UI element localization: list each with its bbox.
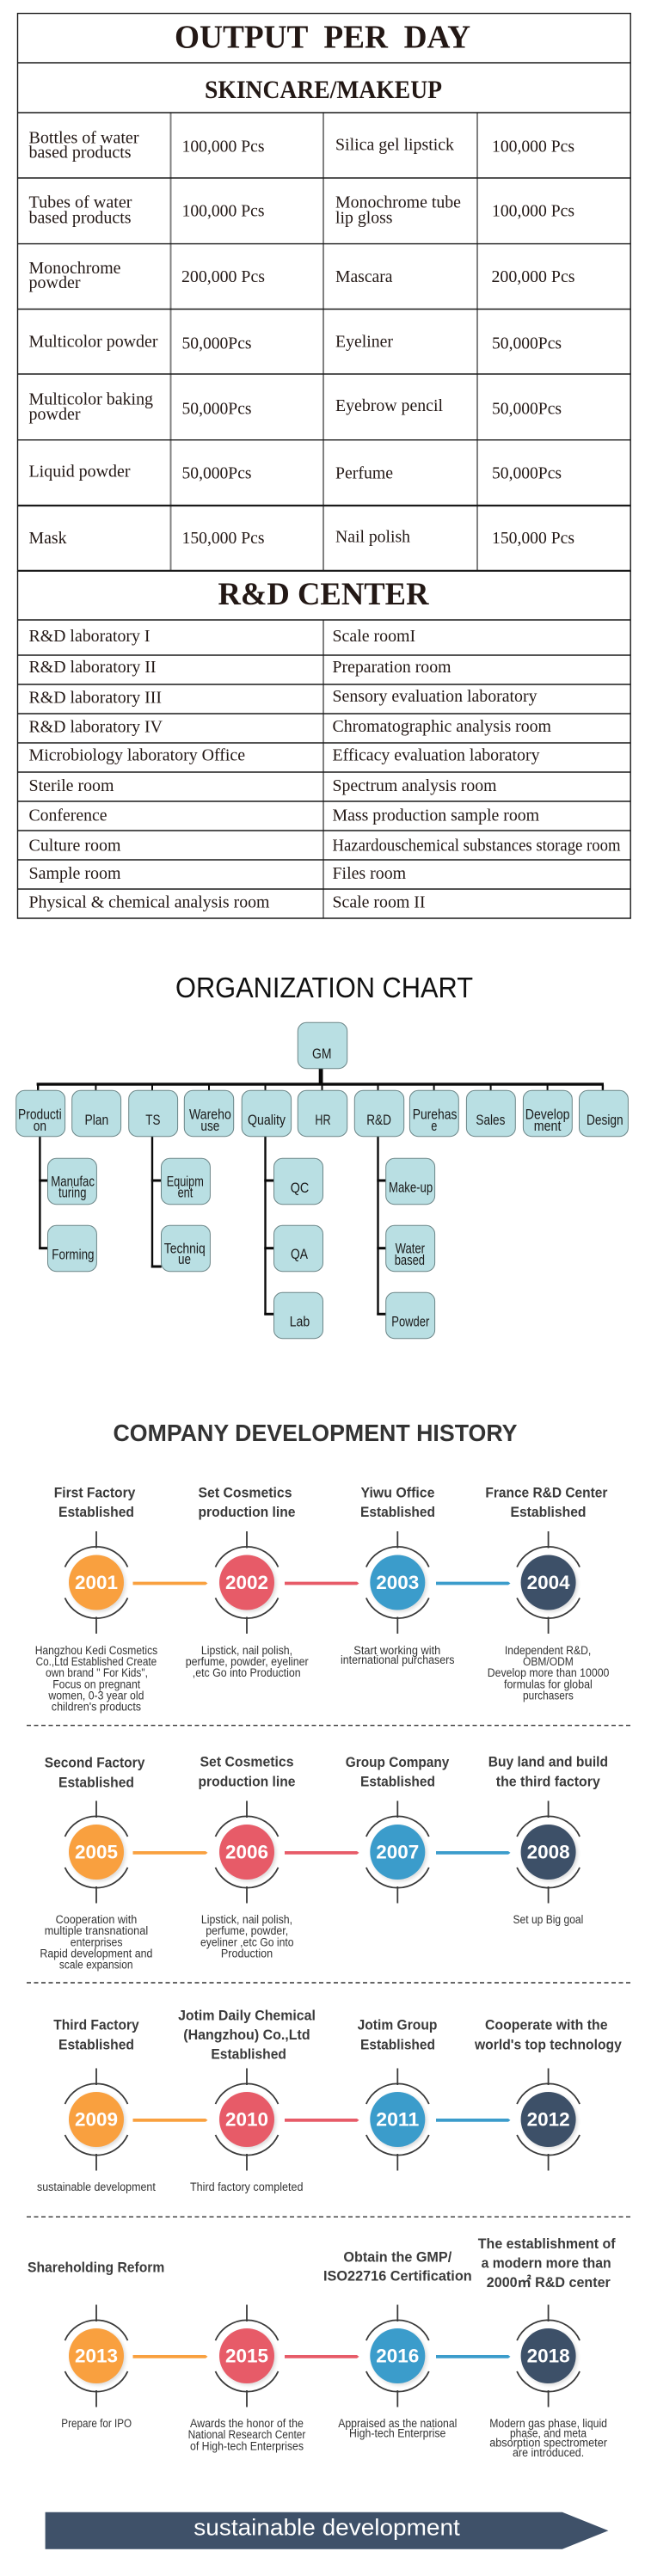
headings row 4: 2000㎡ R&D center (487, 2274, 611, 2291)
headings row 4 (28, 2236, 616, 2291)
row 2: Tubes of water (29, 194, 132, 212)
descriptions row 1: Focus on pregnant (52, 1677, 140, 1690)
room list: right column: Mass production sample room (332, 807, 540, 825)
node: 2001: 2001 (75, 1572, 118, 1593)
node: 2002 (215, 1531, 279, 1634)
descriptions row 4: Modern gas phase, liquid (489, 2417, 607, 2430)
box: Development (523, 1090, 572, 1137)
headings row 4: Shareholding Reform (28, 2260, 164, 2275)
row 7: Mask (29, 530, 67, 548)
headings row 2: Group Company (346, 1755, 450, 1770)
box: Production (16, 1090, 65, 1137)
headings row 2: Second Factory (45, 1756, 145, 1771)
box: GM: GM (312, 1046, 332, 1062)
descriptions row 1: OBM/ODM (523, 1655, 574, 1668)
box: Quality (242, 1090, 292, 1137)
headings row 2: Buy land and build (488, 1755, 608, 1770)
box: TS (129, 1090, 178, 1137)
headings row 1: Established (511, 1505, 587, 1520)
row 3: 200,000 Pcs (181, 268, 265, 286)
room list: left column: Sterile room (29, 776, 114, 795)
row 3: Monochrome (29, 260, 120, 278)
box: Powder (386, 1292, 435, 1339)
box: Lab: Lab (290, 1314, 310, 1329)
room list: left column: Physical & chemical analysis room (29, 893, 270, 912)
room list: right column: Files room (332, 864, 407, 883)
descriptions row 1: ,etc Go into Production (193, 1666, 301, 1679)
descriptions row 3: Third factory completed (190, 2180, 303, 2193)
row 4: Eyeliner (335, 334, 394, 352)
row 7 (29, 528, 574, 548)
descriptions row 1: own brand " For Kids", (46, 1666, 148, 1679)
node: 2003: 2003 (376, 1572, 419, 1593)
headings row 1: Established (360, 1505, 435, 1520)
connector arrows row 2 (132, 1851, 511, 1855)
headings row 2: Established (58, 1775, 134, 1790)
room list: left column: R&D laboratory IV (29, 718, 163, 737)
box: Manufacturing: turing (58, 1185, 86, 1200)
box: Water based: Water (396, 1241, 425, 1256)
row 7: 150,000 Pcs (492, 530, 574, 548)
descriptions row 1: women, 0-3 year old (47, 1689, 144, 1702)
box: Plan (72, 1090, 121, 1137)
timeline row: 2001-2004 (35, 1486, 609, 1713)
descriptions row 2: perfume, powder, (206, 1924, 288, 1937)
room list: left column (29, 627, 270, 912)
headings row 4: Obtain the GMP/ (343, 2249, 452, 2265)
timeline row: 2009-2012 (37, 2009, 623, 2193)
box: QA (273, 1225, 323, 1272)
descriptions row 1: Independent R&D, (505, 1644, 591, 1657)
descriptions row 1: Hangzhou Kedi Cosmetics (35, 1644, 157, 1657)
row 1: Silica gel lipstick (335, 136, 454, 155)
box: GM (298, 1022, 347, 1069)
row 1: based products (29, 144, 131, 162)
room list: left column: R&D laboratory III (29, 689, 162, 708)
headings row 3: Cooperate with the (485, 2018, 607, 2033)
row 4: 50,000Pcs (182, 335, 251, 353)
node: 2015 (215, 2304, 279, 2407)
node: 2002: 2002 (225, 1572, 268, 1593)
descriptions row 1: purchasers (523, 1689, 574, 1702)
row 5: Eyebrow pencil (335, 397, 444, 415)
row 3: Mascara (335, 268, 393, 286)
row 6: Perfume (335, 464, 393, 482)
room list: right column: Efficacy evaluation laboratory (332, 746, 540, 765)
box: Make-up: Make-up (389, 1180, 433, 1195)
descriptions row 4: Awards the honor of the (190, 2417, 304, 2430)
node: 2010: 2010 (225, 2108, 268, 2130)
row 1: Bottles of water (29, 129, 139, 148)
descriptions row 2: Cooperation with (56, 1913, 137, 1926)
box: Warehouse: Wareho (189, 1107, 231, 1123)
descriptions row 4: of High-tech Enterprises (190, 2439, 304, 2452)
room list: right column: Spectrum analysis room (332, 776, 497, 795)
descriptions row 1: perfume, powder, eyeliner (186, 1655, 309, 1668)
room list: left column: R&D laboratory I (29, 627, 150, 646)
row 1: 100,000 Pcs (492, 138, 574, 156)
box: Technique: Techniq (164, 1241, 206, 1256)
headings row 4: The establishment of (478, 2236, 616, 2252)
box: Development: ment (534, 1119, 562, 1134)
box: Quality: Quality (248, 1113, 286, 1128)
headings row 3: Jotim Daily Chemical (178, 2009, 316, 2024)
node: 2008: 2008 (527, 1841, 570, 1862)
room list: right column: Chromatographic analysis room (332, 717, 551, 736)
node: 2018 (517, 2304, 580, 2407)
node: 2011: 2011 (376, 2108, 419, 2130)
node: 2011 (366, 2069, 429, 2170)
box: HR: HR (315, 1113, 331, 1128)
box: Purchase: e (431, 1119, 437, 1134)
row 3 (29, 260, 574, 292)
row 5: Multicolor baking (29, 390, 153, 409)
row 2: 100,000 Pcs (182, 203, 265, 220)
box: TS: TS (145, 1113, 160, 1128)
box: QA: QA (291, 1247, 308, 1262)
descriptions row 1: Lipstick, nail polish, (201, 1644, 292, 1657)
node: 2012 (517, 2069, 580, 2170)
descriptions row 1: Start working with (353, 1644, 440, 1657)
row 4: Multicolor powder (29, 334, 158, 352)
row 5: powder (29, 406, 81, 424)
node: 2016 (366, 2304, 429, 2407)
descriptions row 3: sustainable development (37, 2180, 156, 2193)
box: Design: Design (587, 1113, 624, 1128)
node: 2009 (65, 2069, 127, 2170)
connector arrows row 1 (132, 1582, 511, 1585)
row 2 (29, 194, 574, 227)
descriptions row 2: multiple transnational (45, 1924, 148, 1937)
row 6 (29, 463, 562, 482)
box: R&D: R&D (366, 1113, 391, 1128)
row 5: 50,000Pcs (182, 400, 251, 418)
node: 2004 (517, 1531, 580, 1634)
box: QC (273, 1158, 323, 1205)
node: 2015: 2015 (225, 2345, 268, 2366)
headings row 3: Established (211, 2047, 286, 2063)
descriptions row 4: High-tech Enterprise (349, 2426, 445, 2439)
descriptions row 4: phase, and meta (510, 2426, 587, 2439)
box: Manufacturing: Manufac (51, 1174, 95, 1189)
node: 2006: 2006 (225, 1841, 268, 1862)
descriptions row 4: Prepare for IPO (61, 2417, 132, 2430)
headings row 2: production line (198, 1774, 296, 1789)
arrow banner: sustainable development: sustainable development (194, 2514, 460, 2540)
box: Powder: Powder (391, 1314, 430, 1329)
headings row 1: Yiwu Office (361, 1486, 435, 1501)
box: Purchase: Purehas (413, 1107, 457, 1123)
row 6: 50,000Pcs (492, 464, 562, 482)
descriptions row 4: are introduced. (513, 2446, 584, 2459)
room list: right column (332, 627, 621, 912)
title: output per day: OUTPUT PER DAY (175, 19, 470, 55)
descriptions row 2: scale expansion (59, 1959, 132, 1972)
row 1: 100,000 Pcs (182, 138, 265, 156)
room list: left column: Microbiology laboratory Office (29, 746, 245, 765)
box: Water based (386, 1225, 435, 1272)
box: Technique: ue (178, 1252, 191, 1267)
node: 2007 (366, 1800, 429, 1904)
row 6: 50,000Pcs (182, 464, 251, 482)
headings row 3: Jotim Group (358, 2018, 437, 2033)
room list: left column: Conference (29, 807, 108, 825)
box: Manufacturing (48, 1158, 96, 1205)
connector lines (37, 1068, 604, 1316)
box: Production: on (34, 1119, 46, 1134)
descriptions row 1: Co.,Ltd Established Create (36, 1655, 157, 1668)
panel: R&D center table (17, 571, 630, 918)
node: 2018: 2018 (527, 2345, 570, 2366)
box: R&D (354, 1090, 404, 1137)
node: 2005: 2005 (75, 1841, 118, 1862)
row 6: Liquid powder (29, 463, 131, 481)
panel: output per day table (17, 14, 630, 571)
row 1 (29, 129, 574, 162)
node: 2012: 2012 (527, 2108, 570, 2130)
descriptions row 1: Develop more than 10000 (488, 1666, 609, 1679)
node: 2010 (215, 2069, 279, 2170)
connector arrows row 3 (132, 2119, 511, 2122)
headings row 2: the third factory (496, 1774, 601, 1789)
headings row 1: France R&D Center (485, 1486, 608, 1501)
node: 2001 (65, 1531, 127, 1634)
node: 2009: 2009 (75, 2108, 118, 2130)
descriptions row 2: Rapid development and (40, 1947, 152, 1960)
heading: organization chart: ORGANIZATION CHART (175, 972, 473, 1003)
descriptions row 2: eyeliner ,etc Go into (200, 1935, 294, 1948)
box: Equipment (162, 1158, 210, 1205)
descriptions row 3 (37, 2180, 303, 2193)
timeline row: 2013-2018 (28, 2236, 616, 2459)
descriptions row 4: Appraised as the national (338, 2417, 457, 2430)
descriptions row 2: enterprises (71, 1935, 123, 1948)
descriptions row 4: National Research Center (188, 2428, 306, 2441)
headings row 3: Established (360, 2037, 435, 2052)
headings row 3: Third Factory (53, 2018, 139, 2033)
arrow banner: sustainable development (46, 2512, 608, 2549)
headings row 3: Established (58, 2037, 134, 2052)
heading: R&D center: R&D CENTER (218, 577, 430, 612)
box: Sales: Sales (476, 1113, 505, 1128)
node: 2005 (65, 1800, 127, 1904)
headings row 1: production line (198, 1505, 296, 1520)
row 2: based products (29, 209, 131, 227)
box: HR (298, 1090, 347, 1137)
descriptions row 1 (35, 1644, 609, 1713)
box: Plan: Plan (84, 1113, 108, 1128)
node: 2013: 2013 (75, 2345, 118, 2366)
row 5 (29, 390, 562, 424)
node: 2006 (215, 1800, 279, 1904)
headings row 4: a modern more than (482, 2256, 611, 2272)
node: 2003 (366, 1531, 429, 1634)
descriptions row 2: Set up Big goal (513, 1913, 583, 1926)
row 4: 50,000Pcs (492, 335, 562, 353)
box: QC: QC (291, 1181, 309, 1196)
node: 2008 (517, 1800, 580, 1904)
descriptions row 1: international purchasers (341, 1653, 455, 1666)
headings row 1: First Factory (54, 1486, 136, 1501)
box: Technique (162, 1225, 210, 1272)
row 3: powder (29, 274, 81, 292)
descriptions row 1: children's products (52, 1700, 141, 1713)
connector arrows row 4 (132, 2355, 511, 2358)
chart: organization chart (16, 1022, 628, 1339)
room list: right column: Scale room II (332, 893, 425, 912)
room list: right column: Preparation room (332, 658, 452, 677)
headings row 1: Set Cosmetics (198, 1486, 292, 1501)
R&D table grid (17, 571, 630, 918)
row 2: 100,000 Pcs (492, 203, 574, 220)
headings row 2: Established (360, 1775, 435, 1790)
node: 2013 (65, 2304, 127, 2407)
box: Equipment: Equipm (167, 1174, 204, 1189)
box: Production: Producti (18, 1107, 62, 1123)
headings row 3: (Hangzhou) Co.,Ltd (183, 2027, 310, 2043)
box: Forming (48, 1225, 96, 1272)
box: Purchase (409, 1090, 458, 1137)
node: 2004: 2004 (527, 1572, 570, 1593)
box: Warehouse (184, 1090, 234, 1137)
box: Sales (466, 1090, 515, 1137)
row 2: lip gloss (335, 209, 392, 227)
descriptions row 2: Lipstick, nail polish, (201, 1913, 292, 1926)
headings row 3: world's top technology (474, 2037, 623, 2052)
row 2: Monochrome tube (335, 194, 461, 212)
box: Lab (273, 1292, 323, 1339)
descriptions row 1: formulas for global (504, 1677, 593, 1690)
descriptions row 4 (61, 2417, 607, 2459)
room list: left column: Culture room (29, 837, 121, 856)
descriptions row 4: absorption spectrometer (489, 2437, 607, 2450)
box: Development: Develop (525, 1107, 569, 1123)
box: Equipment: ent (178, 1185, 194, 1200)
headings row 1: Established (58, 1505, 134, 1520)
room list: right column: Scale roomI (332, 627, 415, 646)
heading: company development history: COMPANY DEVELOPMENT HISTORY (114, 1420, 518, 1446)
box: Make-up (386, 1158, 435, 1205)
room list: right column: Sensory evaluation laboratory (332, 687, 537, 706)
headings row 1 (54, 1486, 608, 1520)
row 7: 150,000 Pcs (182, 530, 265, 548)
descriptions row 2 (40, 1913, 583, 1972)
headings row 4: ISO22716 Certification (323, 2269, 472, 2285)
table grid (17, 14, 630, 571)
heading: skincare/makeup: SKINCARE/MAKEUP (205, 76, 442, 104)
headings row 3 (53, 2009, 623, 2063)
row 5: 50,000Pcs (492, 400, 562, 418)
descriptions row 2: Production (221, 1947, 273, 1960)
row 3: 200,000 Pcs (492, 268, 574, 286)
node: 2007: 2007 (376, 1841, 419, 1862)
timeline row: 2005-2008 (40, 1755, 608, 1972)
box: Design (580, 1090, 628, 1137)
room list: left column: Sample room (29, 864, 121, 883)
headings row 2 (45, 1755, 608, 1790)
box: Warehouse: use (200, 1119, 219, 1134)
box: Forming: Forming (52, 1247, 95, 1262)
node: 2016: 2016 (376, 2345, 419, 2366)
room list: left column: R&D laboratory II (29, 658, 157, 677)
row 4 (29, 334, 562, 353)
room list: right column: Hazardouschemical substances storage room (332, 837, 621, 856)
box: Water based: based (395, 1253, 425, 1268)
headings row 2: Set Cosmetics (200, 1755, 294, 1770)
row 7: Nail polish (335, 528, 410, 547)
